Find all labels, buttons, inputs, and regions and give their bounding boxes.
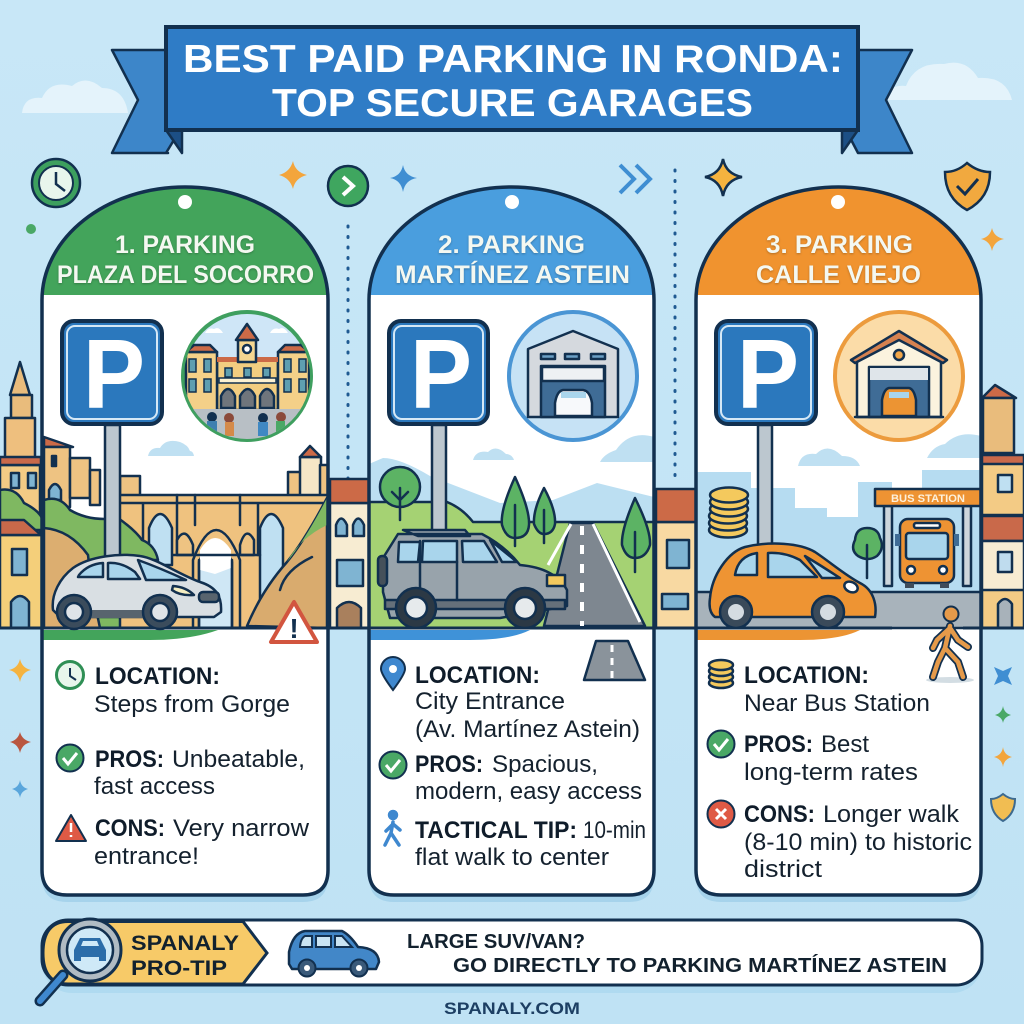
icon: parking sign 1: P <box>83 319 145 429</box>
text: card 1 location: LOCATION: <box>95 663 220 690</box>
header labels: card 3 <box>756 195 921 289</box>
car: silver <box>53 555 221 629</box>
icon: warning triangle: ! <box>289 613 299 644</box>
text: card 2 tactical tip: TACTICAL TIP: <box>415 817 577 844</box>
scene: Ronda bridge <box>44 437 330 628</box>
icon: warning triangle <box>271 602 317 644</box>
text: card 1 cons: Very narrow <box>173 815 310 842</box>
icon: parking sign 3: P <box>737 319 799 429</box>
text: card 3 cons: (8-10 min) to historic <box>744 829 972 856</box>
text: card 2 pros: Spacious, <box>492 751 598 778</box>
text: card 1 location <box>56 662 290 718</box>
text: card 3 location: LOCATION: <box>744 662 869 689</box>
icon: magnifying glass <box>40 919 121 1001</box>
panel: card 2 <box>369 187 654 902</box>
orange ground strip <box>696 630 860 640</box>
decorative clouds <box>22 63 1012 113</box>
panel: card 3 <box>696 187 981 902</box>
tree <box>502 477 529 546</box>
side town: left <box>0 362 42 628</box>
text: card 3 cons <box>708 800 972 883</box>
icon: walker <box>385 812 400 845</box>
text: card 3 cons: district <box>744 856 822 883</box>
tip text: GO DIRECTLY TO PARKING MARTÍNEZ ASTEIN <box>453 954 947 977</box>
icon: plaza circle <box>180 312 314 444</box>
blue ground strip <box>369 630 530 640</box>
ground line <box>42 626 328 630</box>
text: card 1 cons: CONS: <box>95 815 165 842</box>
text: card 2 pros <box>380 751 642 805</box>
side town: right <box>982 385 1024 628</box>
icon: coin stack <box>709 488 748 538</box>
buildings <box>44 437 329 507</box>
header labels: card 1 <box>57 195 314 289</box>
ground line <box>0 626 1024 630</box>
header labels: card 2: 2. PARKING <box>438 231 585 259</box>
text: card 2 location: City Entrance <box>415 688 565 715</box>
text: card 3 location: Near Bus Station <box>744 690 930 717</box>
icon: cross <box>708 800 734 828</box>
text: card 3 cons: Longer walk <box>823 801 960 828</box>
text: card 1 pros: PROS: <box>95 746 164 773</box>
scene: city entrance road <box>369 435 654 628</box>
icon: chevron badge <box>328 166 368 206</box>
pro-tip tag: PRO-TIP <box>131 957 227 980</box>
icon: parking sign 2 <box>389 319 488 429</box>
header labels: card 3: 3. PARKING <box>766 231 913 259</box>
pro-tip tag <box>43 922 267 984</box>
pole 2 <box>432 425 446 535</box>
icon: garage circle <box>835 312 963 440</box>
side town: between cards 1 and 2 <box>330 479 369 628</box>
icon: modern garage circle <box>509 312 637 440</box>
decorative sparkles <box>9 159 1015 821</box>
tree <box>534 488 555 543</box>
text: card 2 pros: modern, easy access <box>415 778 642 805</box>
scene: bus station <box>696 434 981 640</box>
side town: between cards 2 and 3 <box>656 489 696 628</box>
header labels: card 2: MARTÍNEZ ASTEIN <box>395 260 630 289</box>
icon: shield <box>945 163 990 210</box>
text: card 3 pros <box>708 730 918 786</box>
header: card 3 <box>696 187 981 295</box>
pro-tip tag: SPANALY <box>131 932 239 955</box>
text: card 1 cons: entrance! <box>94 843 199 870</box>
icon: parking sign 1 <box>62 319 162 429</box>
icon: check <box>708 730 734 758</box>
text: card 1 pros: fast access <box>94 773 215 800</box>
text: card 2 location: (Av. Martínez Astein) <box>415 716 640 743</box>
ground line <box>369 626 654 630</box>
text: card 2 location: LOCATION: <box>415 662 540 689</box>
icon: bus <box>895 519 959 588</box>
bridge deck <box>118 495 330 628</box>
text: card 2 tactical tip: flat walk to center <box>415 844 609 871</box>
text: card 3 pros: PROS: <box>744 731 813 758</box>
icon: road <box>584 641 645 680</box>
bus station sign: BUS STATION <box>891 493 965 505</box>
title banner <box>112 27 912 153</box>
title text: BEST PAID PARKING IN RONDA: <box>183 38 843 81</box>
icon: warning small <box>56 815 86 841</box>
icon: map pin <box>381 657 405 690</box>
text: card 3 pros: long-term rates <box>744 759 918 786</box>
text: card 2 pros: PROS: <box>415 751 483 778</box>
text: card 1 pros <box>56 744 305 800</box>
text: card 1 pros: Unbeatable, <box>172 746 305 773</box>
text: card 2 location <box>381 657 640 743</box>
title text line 2: TOP SECURE GARAGES <box>272 82 753 125</box>
text: card 1 location: Steps from Gorge <box>94 691 290 718</box>
car: orange hatchback <box>710 544 876 628</box>
text: card 1 cons <box>56 815 310 870</box>
text: card 2 tactical tip: 10-min <box>583 817 646 844</box>
icon: double chevrons <box>620 165 650 193</box>
header: card 2 <box>369 187 654 295</box>
pole 1 <box>105 425 120 560</box>
tree <box>622 498 650 572</box>
icon: blue van <box>289 931 379 976</box>
hills <box>44 499 158 628</box>
text: card 3 location <box>709 660 930 717</box>
icon: coins small <box>709 660 733 688</box>
pole 3 <box>758 425 772 550</box>
panel: card 1 <box>42 187 330 902</box>
header labels: card 2 <box>395 195 630 289</box>
text: card 3 pros: Best <box>821 731 869 758</box>
header labels: card 1: PLAZA DEL SOCORRO <box>57 261 314 289</box>
tree <box>853 528 882 578</box>
tree <box>380 467 420 520</box>
tip text: LARGE SUV/VAN? <box>407 931 585 953</box>
footer url: SPANALY.COM <box>444 999 580 1018</box>
icon: walking person <box>926 606 974 683</box>
header: card 1 <box>42 187 328 295</box>
header labels: card 1: 1. PARKING <box>115 231 255 259</box>
icon: check <box>56 744 84 772</box>
icon: check <box>380 752 406 778</box>
icon: clock <box>32 159 80 207</box>
text: card 3 cons: CONS: <box>744 801 815 828</box>
header labels: card 3: CALLE VIEJO <box>756 261 921 289</box>
text: card 2 tactical tip <box>385 812 646 871</box>
green ground strip <box>42 630 218 640</box>
dotted dividers <box>348 170 675 480</box>
icon: clock small <box>56 662 84 688</box>
panel: pro-tip bar <box>40 919 982 1001</box>
tip text <box>407 931 947 977</box>
ground line <box>696 626 981 630</box>
icon: parking sign 2: P <box>410 319 472 429</box>
icon: parking sign 3 <box>716 319 816 429</box>
bus station sign <box>875 489 981 506</box>
car: grey SUV <box>378 530 567 628</box>
